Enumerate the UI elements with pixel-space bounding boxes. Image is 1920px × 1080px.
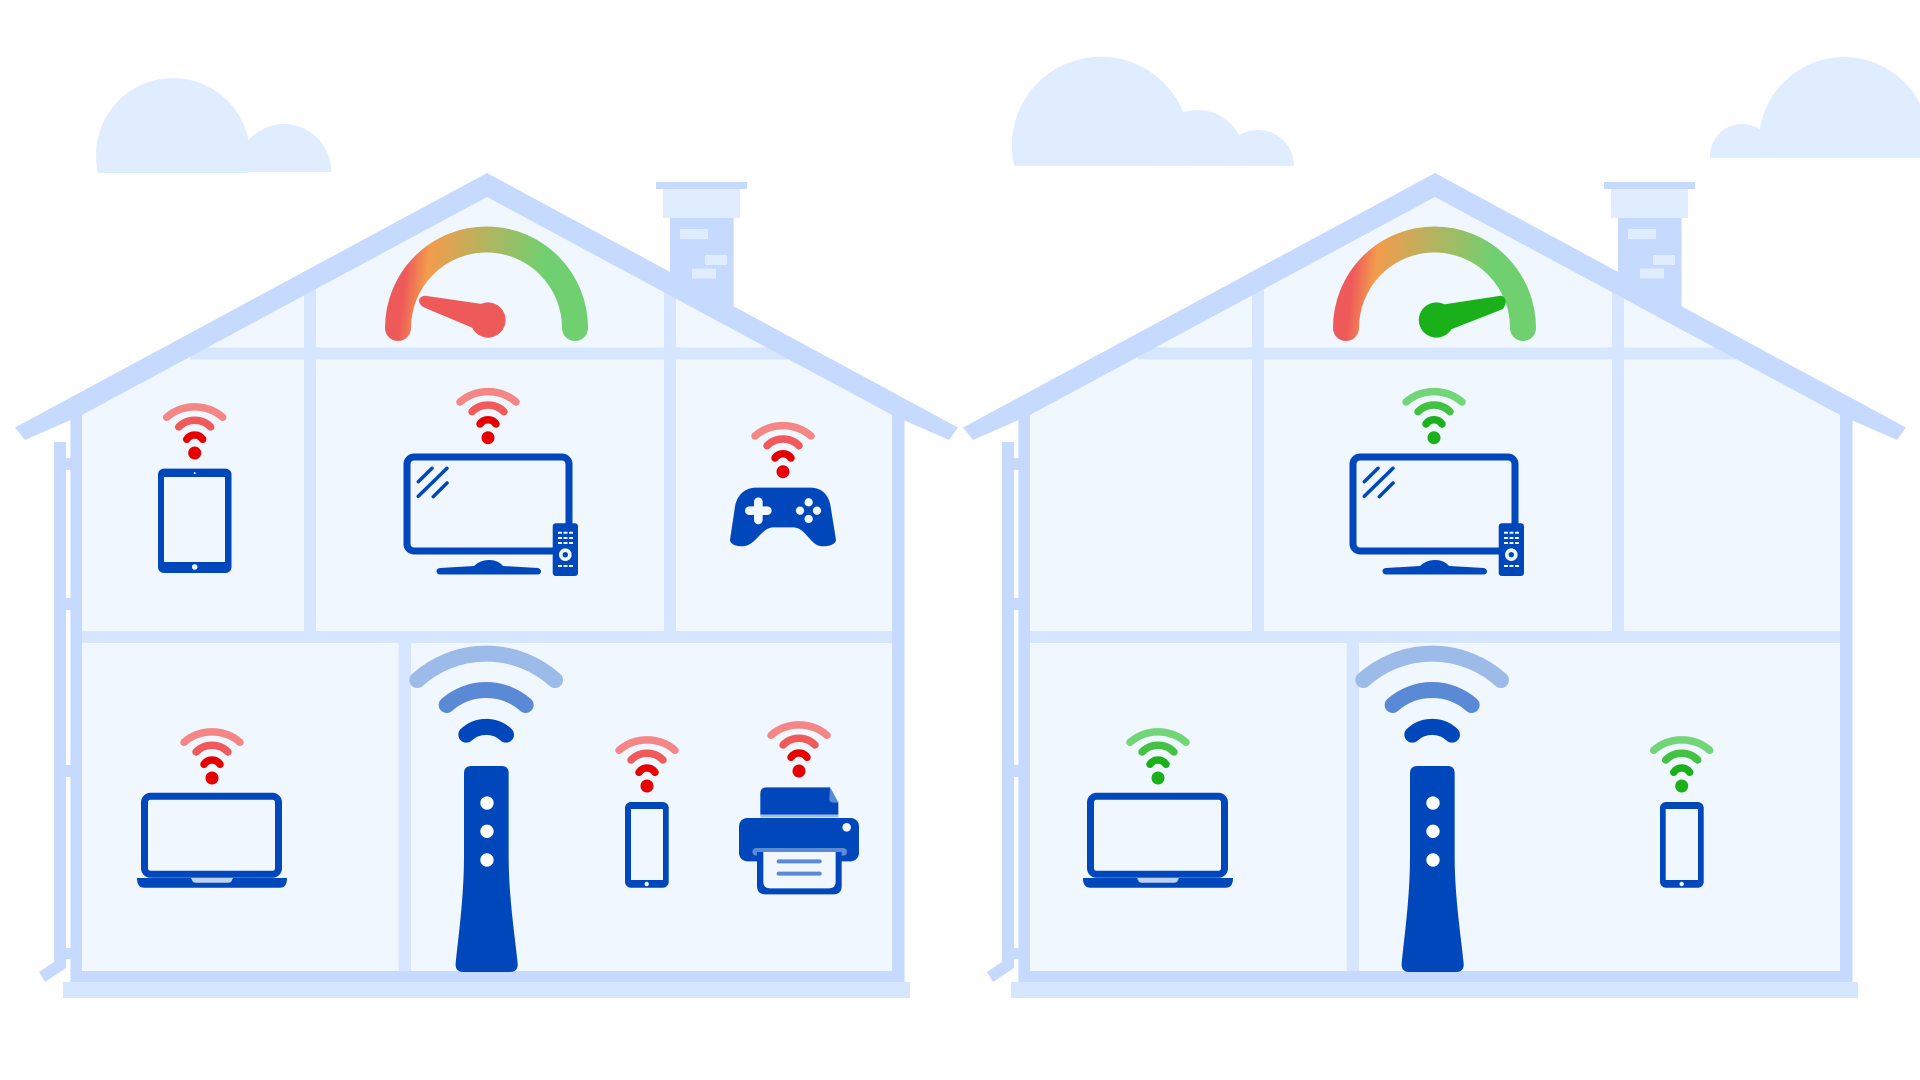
- foundation: [1011, 982, 1858, 998]
- chimney: [1604, 182, 1695, 310]
- wifi signal: phone: [1654, 740, 1710, 792]
- device: television with remote: [407, 457, 578, 576]
- downpipe: [39, 442, 71, 982]
- device: television with remote: [1353, 457, 1524, 576]
- cloud: centre: [1012, 56, 1294, 166]
- wifi signal: phone: [619, 740, 675, 792]
- house interior: [1030, 197, 1840, 971]
- interior beams and studs: [1030, 280, 1840, 971]
- wifi signal: game controller: [755, 426, 811, 478]
- wifi signal: laptop: [1130, 732, 1186, 784]
- house: fast wifi (right): [963, 173, 1906, 998]
- foundation: [63, 982, 910, 998]
- device: printer: [739, 787, 859, 894]
- device: laptop: [137, 796, 287, 888]
- device: laptop: [1083, 796, 1233, 888]
- router with signal: [1363, 654, 1501, 972]
- wifi signal: printer: [771, 725, 827, 778]
- interior beams and studs: [82, 280, 892, 971]
- house interior: [82, 197, 892, 971]
- wifi signal: tablet: [167, 407, 223, 460]
- downpipe: [987, 442, 1019, 982]
- house: slow wifi (left): [15, 173, 958, 998]
- device: game controller: [730, 488, 836, 546]
- gauge: slow: [398, 240, 575, 338]
- cloud: left house: [96, 78, 331, 173]
- device: phone: [1660, 802, 1704, 888]
- roof: [963, 173, 1906, 440]
- gauge: fast: [1346, 240, 1523, 338]
- cloud: right: [1710, 57, 1920, 158]
- walls and floor: [70, 412, 904, 982]
- chimney: [656, 182, 747, 310]
- device: tablet: [158, 469, 232, 573]
- device: phone: [625, 802, 669, 888]
- walls and floor: [1018, 412, 1852, 982]
- wifi signal: laptop: [184, 732, 240, 784]
- wifi signal: television: [460, 392, 516, 444]
- router with signal: [417, 654, 555, 972]
- wifi signal: television: [1406, 392, 1462, 444]
- roof: [15, 173, 958, 440]
